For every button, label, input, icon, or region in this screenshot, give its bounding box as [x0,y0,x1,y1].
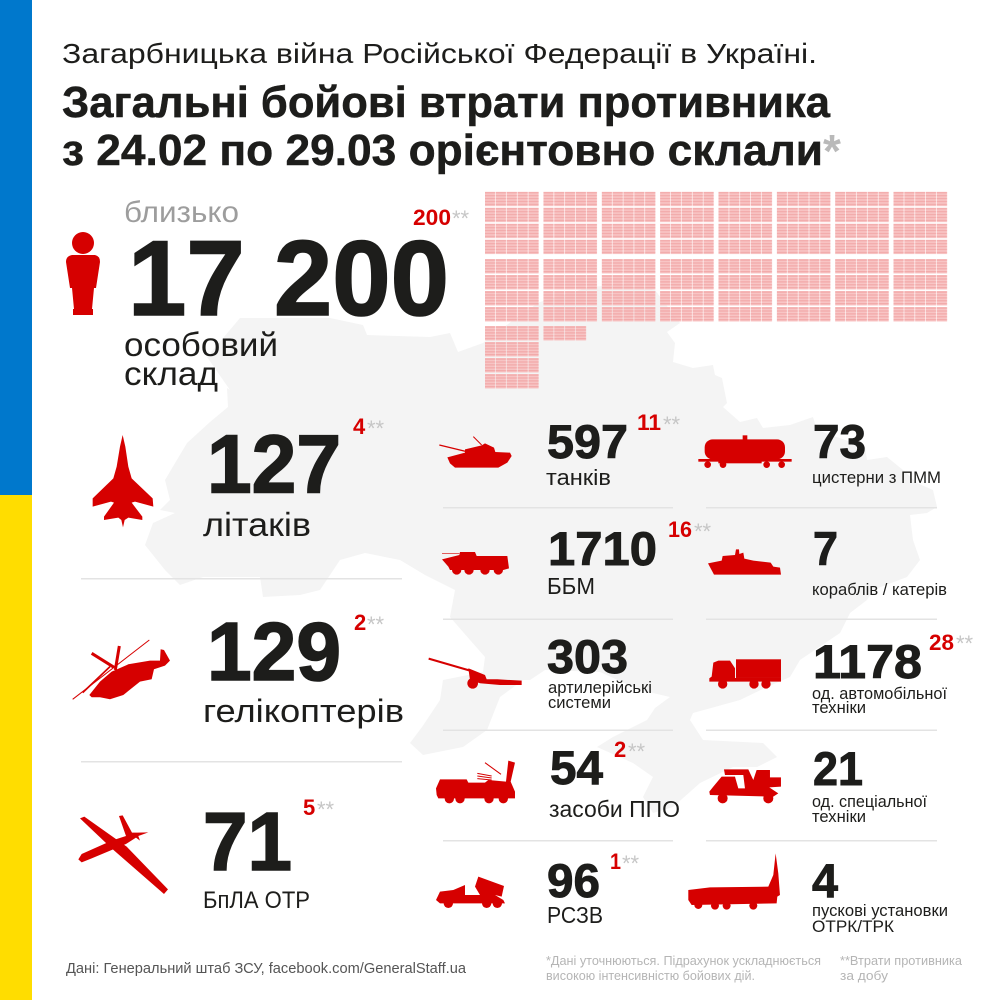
icon: jet [93,435,153,527]
panel: personnel: склад [124,355,218,392]
title: * [823,125,841,177]
panel: artillery: 303 [547,630,628,683]
panel: artillery: артилерійські [548,679,652,697]
panel: aircraft: літаків [203,506,311,543]
panel: automotive: 1178 [813,635,922,688]
panel: aircraft: 127 [207,418,341,510]
personnel tally grid [485,192,947,388]
panel: helicopters [73,605,404,729]
panel: special vehicles [709,742,927,826]
icon: drone [78,815,168,894]
panel: armoured vehicles: 1710 [548,522,657,575]
panel: personnel: особовий [124,326,278,363]
panel: automotive: од. автомобільної [812,685,947,703]
panel: air defence [436,737,680,822]
panel: tanks [439,410,680,490]
panel: artillery: системи [548,694,611,712]
panel: launchers: ОТРК/ТРК [812,918,894,936]
panel: fuel tankers: 73 [813,415,866,468]
title [62,38,841,177]
icon: helicopter [73,640,170,699]
panel: aircraft: 4 [353,414,366,439]
panel: helicopters: 2 [354,610,366,635]
icon: tank wagon [698,435,792,468]
panel: drones [78,795,334,914]
panel: tanks: ** [663,412,680,437]
icon: rocket launcher [436,877,505,908]
icon: air defence vehicle [436,761,515,803]
title: Загальні бойові втрати противника [62,78,831,127]
panel: armoured vehicles [442,517,711,599]
panel: MLRS: ** [622,851,639,876]
panel: ships [708,522,947,599]
panel: special vehicles: 21 [813,742,863,795]
dividers [81,507,937,842]
panel: launchers: 4 [812,854,838,907]
panel: MLRS: РСЗВ [547,902,603,928]
panel: personnel [66,196,469,392]
footnote: daily losses [840,954,962,983]
icon: howitzer [429,659,522,689]
panel: helicopters: гелікоптерів [203,693,404,729]
panel: helicopters: 129 [207,605,341,698]
panel: artillery [429,630,652,712]
panel: armoured vehicles: 16 [668,517,692,542]
panel: drones: БпЛА ОТР [203,887,310,914]
panel: tanks: 11 [637,410,661,435]
icon: tank [439,437,512,468]
panel: automotive: техніки [812,699,866,717]
panel: MLRS [436,849,639,928]
panel: personnel: 17 200 [128,218,449,338]
footnote: data [546,954,821,983]
panel: drones: ** [317,797,334,822]
icon: person [66,232,100,315]
panel: aircraft [93,414,384,543]
icon: APC [442,552,509,575]
panel: automotive: 28 [929,630,954,655]
panel: fuel tankers [698,415,941,487]
icon: truck [709,659,781,689]
panel: ships: 7 [813,522,838,575]
footnote: daily losses: **Втрати противника [840,954,962,968]
panel: personnel: близько [124,196,239,229]
flag stripe [0,0,32,1000]
panel: helicopters: ** [367,612,384,637]
panel: personnel: ** [452,206,469,231]
map of Ukraine [145,285,937,813]
panel: armoured vehicles: ББМ [547,573,595,599]
panel: ships: кораблів / катерів [812,580,947,599]
panel: automotive: ** [956,631,973,656]
title: з 24.02 по 29.03 орієнтовно склали [62,126,823,175]
panel: drones: 5 [303,795,315,820]
panel: aircraft: ** [367,416,384,441]
panel: air defence: ** [628,739,645,764]
panel: air defence: 54 [550,741,603,794]
panel: launchers: пускові установки [812,902,948,920]
footnote: daily losses: за добу [840,969,889,983]
panel: launchers [688,853,948,936]
footnote: data: *Дані уточнюються. Підрахунок ускладнюється [546,954,821,968]
panel: air defence: 2 [614,737,626,762]
panel: special vehicles: техніки [812,808,866,826]
panel: special vehicles: од. спеціальної [812,793,927,811]
source note: Дані: Генеральний штаб ЗСУ, facebook.com/GeneralStaff.ua [66,960,467,977]
panel: MLRS: 1 [610,849,621,874]
panel: tanks: танків [546,465,611,490]
panel: drones: 71 [203,795,292,888]
icon: ship [708,549,781,575]
panel: fuel tankers: цистерни з ПММ [812,468,941,487]
panel: armoured vehicles: ** [694,519,711,544]
panel: automotive [709,630,973,717]
footnote: data: високою інтенсивністю бойових дій. [546,969,755,983]
title: Загарбницька війна Російської Федерації в Україні. [62,38,817,69]
panel: air defence: засоби ППО [549,796,680,822]
icon: missile launcher [688,853,780,910]
panel: tanks: 597 [547,415,628,468]
panel: MLRS: 96 [547,854,600,907]
icon: special vehicle [709,769,781,803]
panel: personnel: 200 [413,205,451,230]
